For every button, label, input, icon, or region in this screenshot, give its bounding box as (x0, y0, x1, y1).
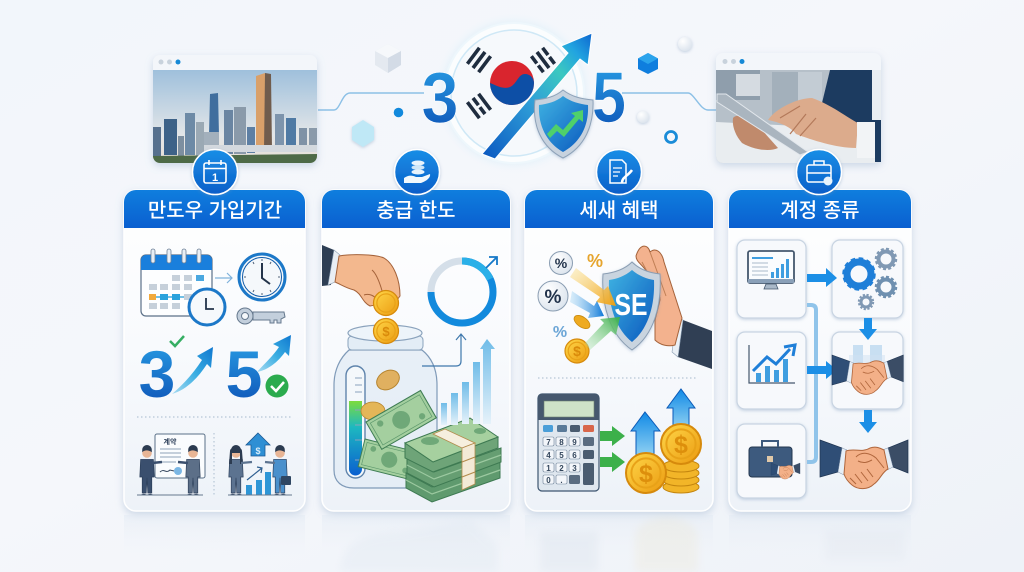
header bar (124, 190, 305, 228)
tilted coin (373, 366, 403, 394)
icon badge: calendar: 1 (212, 172, 218, 184)
icon badge: briefcase (796, 150, 842, 194)
heading: 충급 한도 (376, 199, 456, 222)
connector lines (318, 93, 718, 110)
percent bubbles and coins (538, 251, 603, 363)
converging arrows (570, 268, 620, 350)
photo: city skyline window (153, 55, 317, 163)
progress ring (431, 257, 497, 323)
calculator: 3 (572, 464, 577, 473)
panel card (322, 190, 510, 511)
dotted divider (538, 377, 698, 379)
handshake tile art (832, 345, 903, 394)
digit 5 with arrow (226, 335, 291, 411)
calculator: 9 (572, 438, 577, 447)
growth scene (228, 433, 292, 495)
arrow to handshake (807, 361, 837, 379)
gears (844, 249, 896, 309)
percent bubbles and coins: % (545, 287, 562, 308)
heading: 만도우 가입기간 (148, 199, 282, 222)
rising arrow (482, 33, 592, 159)
hand dropping coin (322, 245, 400, 316)
green arrows (600, 426, 625, 472)
arrow to gears (807, 268, 837, 287)
digit 3 with arrow (139, 336, 213, 411)
contract scene: 계약 (164, 437, 177, 446)
panel 1: 만도우 가입기간 (124, 150, 305, 511)
heading: 세새 혜택 (579, 199, 659, 222)
panel card (729, 190, 911, 511)
heading: 계정 종류 (780, 199, 860, 222)
digit 3 with arrow: 3 (139, 337, 175, 411)
large handshake (820, 440, 908, 489)
chart icon (749, 345, 795, 383)
monitor icon (748, 251, 794, 289)
cash bundles (405, 418, 501, 502)
digit 5 with arrow: 5 (226, 337, 262, 411)
calculator: 5 (559, 451, 564, 460)
shield with SE: SE (614, 287, 648, 322)
header bar (525, 190, 713, 228)
down arrow (859, 318, 877, 340)
percent bubbles and coins: % (587, 251, 603, 271)
down arrow (859, 410, 877, 433)
header bar (729, 190, 911, 228)
cash in jar (358, 390, 436, 480)
gold coins (626, 424, 701, 493)
fading growth bars (441, 339, 495, 425)
key (237, 308, 285, 324)
calculator: . (560, 476, 563, 485)
photo: hands using a tablet window (716, 53, 881, 163)
wall clock (239, 254, 285, 300)
shield with SE (603, 262, 660, 350)
gold coins: $ (674, 431, 688, 459)
header bar (322, 190, 510, 228)
calculator: 4 (546, 451, 551, 460)
taegeuk (490, 61, 534, 105)
calculator: 1 (546, 464, 551, 473)
dotted divider (137, 417, 293, 495)
panel card (525, 190, 713, 511)
flow tiles (737, 240, 903, 498)
percent bubbles and coins: $ (573, 343, 581, 359)
panel 2: 충급 한도 (322, 150, 510, 511)
blue up arrows (631, 389, 695, 455)
coin above jar: $ (382, 324, 390, 339)
emblem ring (434, 13, 594, 173)
calculator: 8 (559, 438, 564, 447)
thermometer gauge (346, 366, 365, 478)
decorative floating shapes (352, 37, 692, 147)
glass jar (334, 318, 437, 488)
percent bubbles and coins: % (555, 255, 568, 271)
panel card (124, 190, 305, 511)
calculator: 7 (546, 438, 551, 447)
connector bracket (807, 305, 816, 462)
panel 3: 세새 혜택 (525, 150, 713, 511)
calculator: 2 (559, 464, 564, 473)
hero emblem: Korean flag, 3/5 and growth arrow (422, 13, 626, 173)
small arrow (215, 273, 232, 283)
icon badge: coins in hand (394, 150, 440, 194)
trigrams (467, 48, 555, 118)
calendar illustration (141, 249, 225, 325)
calculator: 6 (572, 451, 577, 460)
stop hand (636, 246, 712, 369)
shield (534, 90, 593, 158)
panel 4: 계정 종류 (729, 150, 911, 511)
floor reflections (124, 515, 911, 572)
digit 3: 3 (422, 59, 458, 138)
digit 5: 5 (592, 59, 626, 138)
icon badge: document and pen (596, 150, 642, 194)
calculator (538, 394, 599, 491)
calculator: 0 (546, 476, 551, 485)
coin above jar (374, 318, 398, 344)
briefcase icon (749, 441, 800, 479)
growth scene: $ (255, 446, 261, 456)
icon badge: calendar (192, 150, 238, 194)
percent bubbles and coins: % (553, 324, 567, 341)
contract scene (137, 434, 205, 495)
connector arrow (422, 334, 466, 366)
gold coins: $ (639, 460, 653, 488)
